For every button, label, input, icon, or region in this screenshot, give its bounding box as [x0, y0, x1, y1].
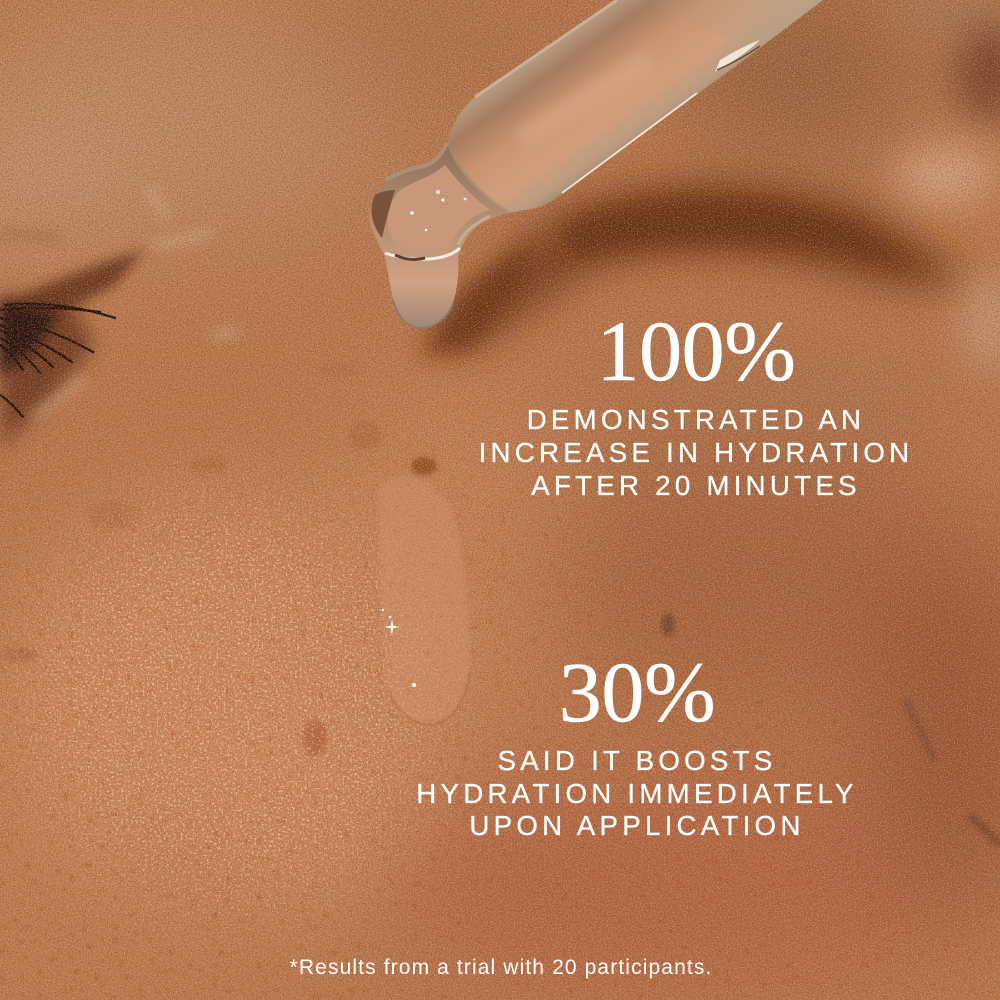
icon: glass dropper with serum drop: [369, 0, 823, 328]
dropper shadow on skin: [425, 182, 985, 345]
number: 30%: 30%: [559, 644, 715, 740]
bulb inner glass: [388, 165, 490, 252]
skin blotches: [0, 363, 1000, 845]
crinkle highlights: [35, 190, 235, 415]
cheek sparkle texture: [0, 446, 484, 954]
text: said it boosts: HYDRATION IMMEDIATELY: [416, 778, 858, 808]
text: said it boosts: [416, 745, 858, 841]
text: said it boosts: UPON APPLICATION: [469, 810, 805, 841]
text: demonstrated an increase: DEMONSTRATED AN: [527, 404, 865, 435]
dropper tube: [447, 0, 823, 213]
freckles and pores: [0, 346, 997, 1000]
text: said it boosts: SAID IT BOOSTS: [498, 745, 776, 776]
text: demonstrated an increase: AFTER 20 MINUTES: [531, 470, 861, 501]
stat: 100% hydration increase: [479, 303, 913, 501]
text: demonstrated an increase: INCREASE IN HYDRATION: [479, 437, 913, 468]
bulb tip and hanging drop: [369, 143, 507, 328]
serum trail on skin: [378, 476, 470, 725]
text: demonstrated an increase: [479, 404, 913, 501]
eye area: [0, 295, 95, 450]
stat: 30% immediate boost: [416, 644, 858, 841]
footnote: *Results from a trial with 20 participants.: [290, 956, 712, 979]
nose and finger shapes upper right: [890, 0, 1000, 370]
eyelashes: [0, 304, 115, 417]
number: 100%: 100%: [596, 303, 796, 399]
